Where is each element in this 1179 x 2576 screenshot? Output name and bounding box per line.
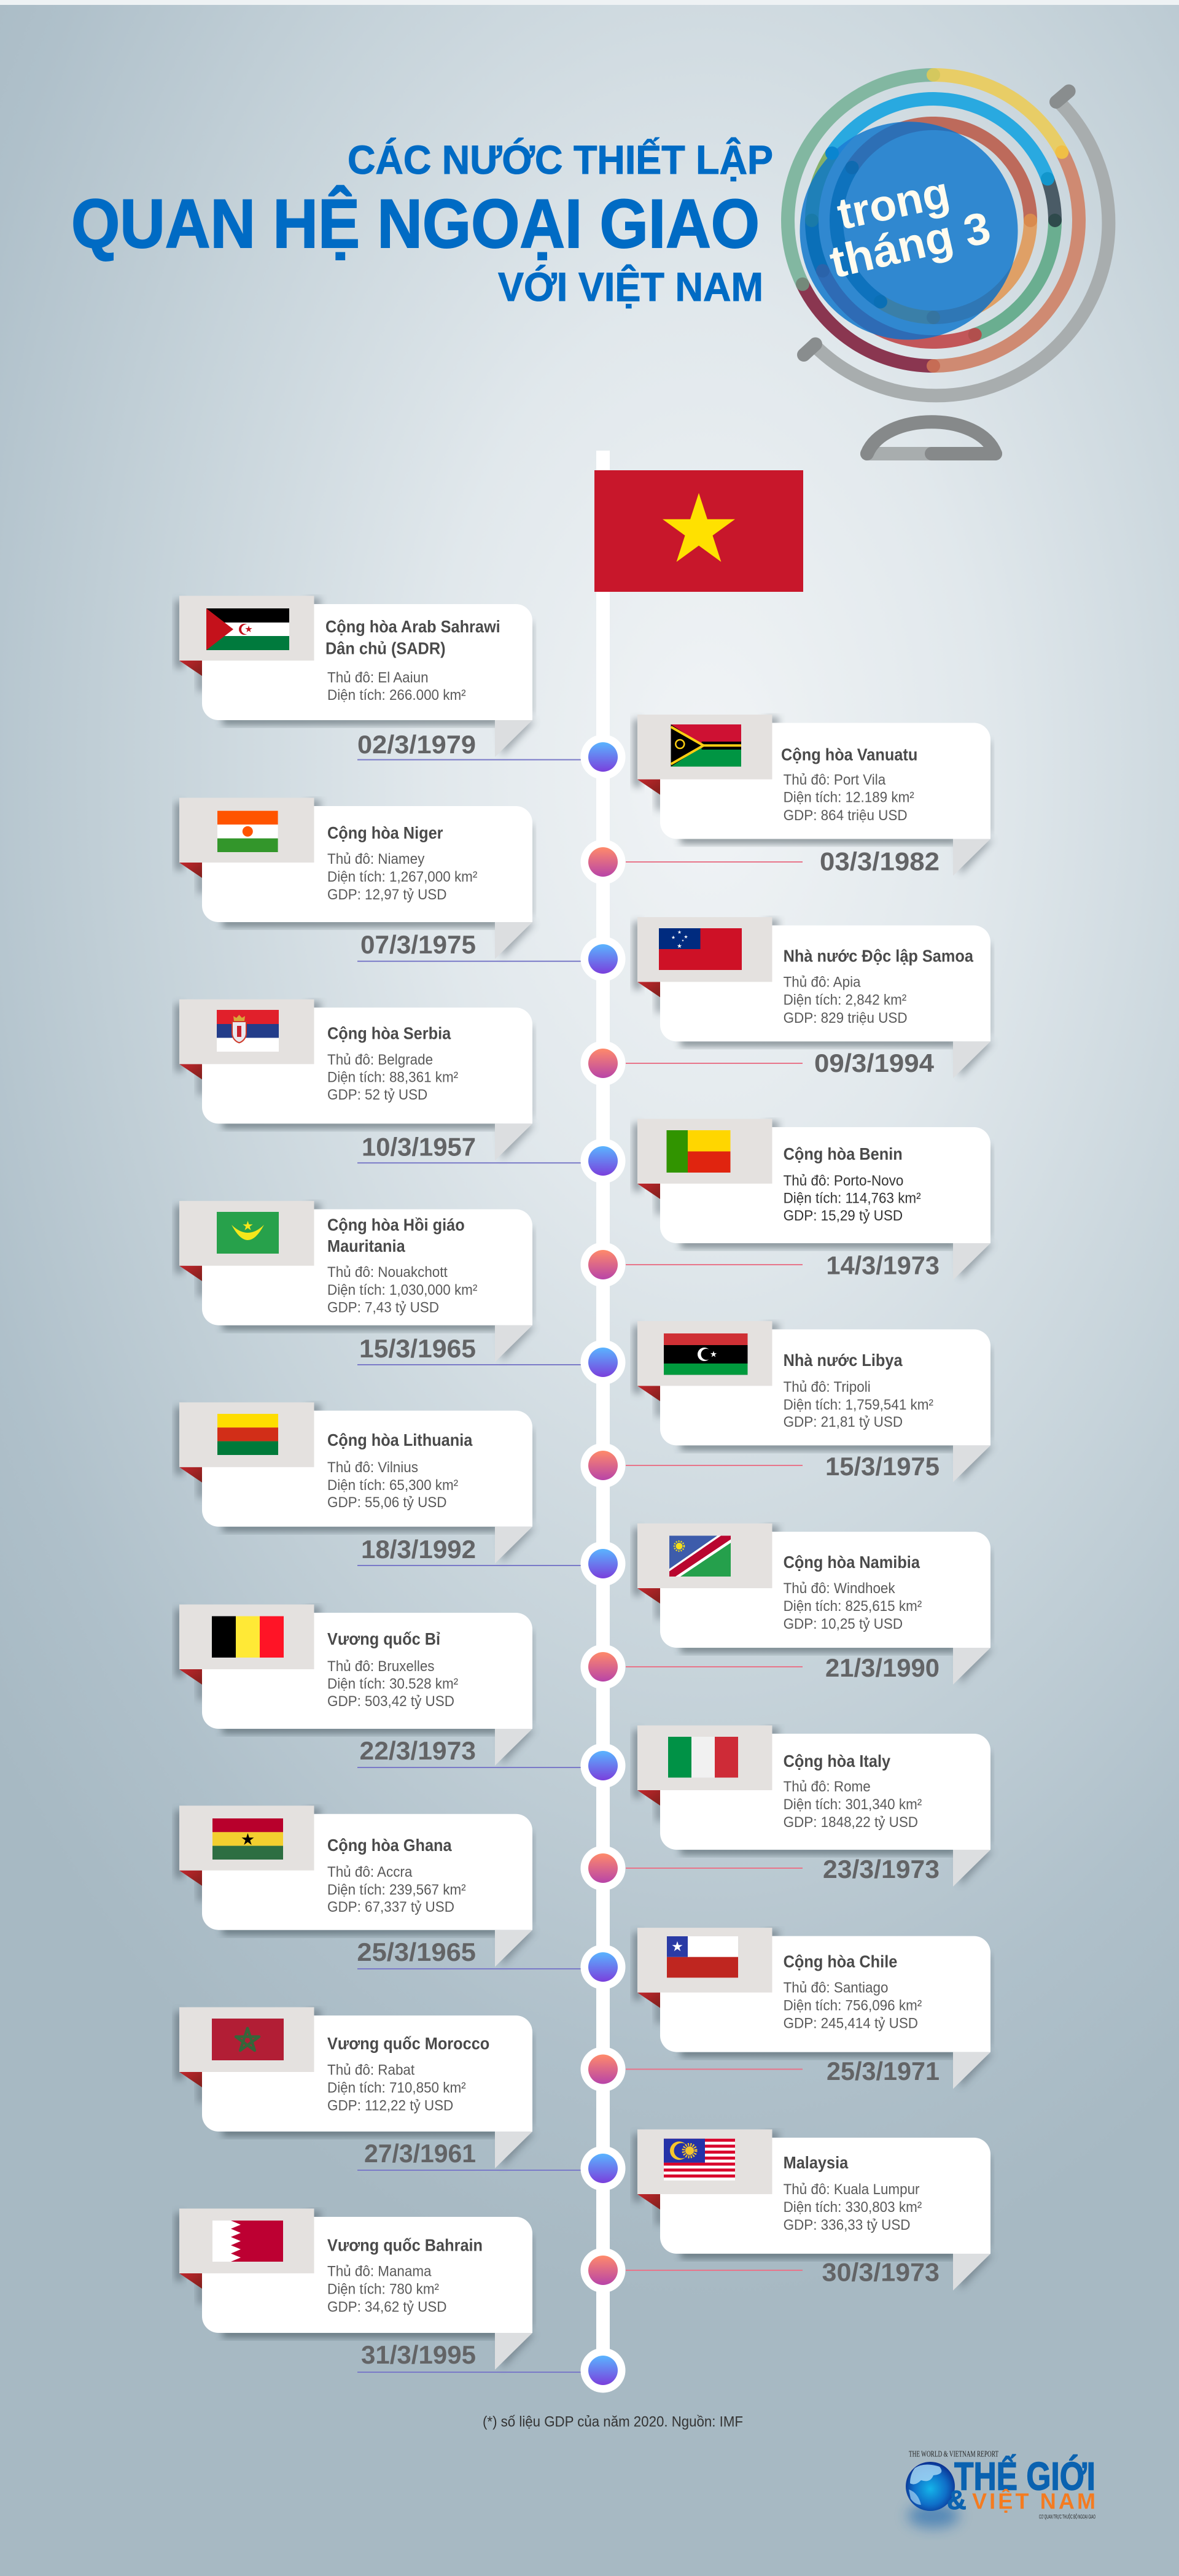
panel: Samoa: GDP: 829 triệu USD: [784, 1009, 908, 1026]
footnote: (*) số liệu GDP của năm 2020. Nguồn: IMF: [483, 2414, 743, 2431]
panel: Sahrawi: Thủ đô: El Aaiun: [327, 669, 429, 686]
date: 21/3/1990: [825, 1653, 940, 1682]
text: Vương quốc Bahrain: [327, 2235, 483, 2255]
title: VỚI VIỆT NAM: [498, 264, 763, 309]
date: 15/3/1975: [825, 1452, 940, 1481]
date: 02/3/1979: [357, 730, 476, 759]
flag: [667, 1130, 731, 1173]
text: Malaysia: [784, 2153, 849, 2172]
panel: Samoa: Thủ đô: Apia: [784, 974, 861, 990]
panel: Malaysia: [581, 2129, 994, 2292]
panel: Sahrawi: Diện tích: 266.000 km²: [327, 686, 466, 703]
panel: Benin: [581, 1119, 994, 1287]
flag: [659, 928, 742, 970]
flag: [217, 1414, 278, 1455]
panel: Libya: Diện tích: 1,759,541 km²: [784, 1396, 933, 1413]
panel: Lithuania: Diện tích: 65,300 km²: [327, 1476, 458, 1493]
panel: Ghana: [176, 1806, 625, 1989]
panel: Italy: Diện tích: 301,340 km²: [784, 1796, 922, 1812]
panel: Serbia: GDP: 52 tỷ USD: [327, 1086, 427, 1103]
text: Cộng hòa Vanuatu: [781, 745, 917, 764]
flag: [217, 1010, 279, 1052]
panel: Serbia: Diện tích: 88,361 km²: [327, 1069, 458, 1085]
panel: Benin: Thủ đô: Porto-Novo: [784, 1172, 903, 1189]
text: Vương quốc Morocco: [327, 2034, 489, 2053]
panel: Bỉ: Diện tích: 30.528 km²: [327, 1675, 458, 1692]
panel: Mauritania: Diện tích: 1,030,000 km²: [327, 1281, 478, 1298]
icon: globe: [788, 68, 1108, 454]
text: Cộng hòa Chile: [784, 1952, 897, 1971]
logo: &: [947, 2485, 967, 2515]
logo: VIỆT NAM: [972, 2488, 1095, 2514]
panel: Bahrain: Diện tích: 780 km²: [327, 2281, 439, 2297]
panel: Italy: Thủ đô: Rome: [784, 1778, 871, 1794]
panel: Italy: GDP: 1848,22 tỷ USD: [784, 1814, 918, 1830]
text: Cộng hòa Ghana: [327, 1836, 453, 1855]
panel: Chile: [581, 1928, 994, 2092]
date: 14/3/1973: [827, 1251, 940, 1279]
panel: Sahrawi: [176, 596, 625, 780]
panel: Namibia: Thủ đô: Windhoek: [784, 1580, 895, 1596]
text: [327, 1215, 465, 1255]
panel: Samoa: Diện tích: 2,842 km²: [784, 991, 907, 1008]
panel: Vanuatu: Thủ đô: Port Vila: [784, 771, 885, 788]
panel: Malaysia: Diện tích: 330,803 km²: [784, 2198, 922, 2215]
date: 15/3/1965: [359, 1334, 476, 1363]
text: Cộng hòa Serbia: [327, 1023, 451, 1043]
panel: Vanuatu: Diện tích: 12.189 km²: [784, 789, 914, 805]
flag: [217, 1212, 279, 1254]
flag: [668, 1737, 738, 1778]
text: Cộng hòa Benin: [784, 1144, 903, 1163]
panel: Libya: [581, 1321, 994, 1488]
panel: Ghana: GDP: 67,337 tỷ USD: [327, 1898, 454, 1915]
panel: Malaysia: Thủ đô: Kuala Lumpur: [784, 2181, 920, 2197]
panel: Serbia: Thủ đô: Belgrade: [327, 1051, 433, 1068]
panel: Bỉ: GDP: 503,42 tỷ USD: [327, 1693, 454, 1709]
date: 09/3/1994: [814, 1049, 935, 1077]
text: Cộng hòa Lithuania: [327, 1430, 473, 1449]
panel: Bahrain: GDP: 34,62 tỷ USD: [327, 2299, 446, 2315]
panel: Bahrain: [176, 2209, 625, 2393]
flag: [671, 724, 741, 767]
date: 22/3/1973: [360, 1736, 476, 1765]
text: Cộng hòa Namibia: [784, 1553, 920, 1572]
panel: Morocco: GDP: 112,22 tỷ USD: [327, 2097, 453, 2114]
flag: [212, 2221, 283, 2262]
logo: THE WORLD & VIETNAM REPORT: [909, 2450, 998, 2459]
date: 27/3/1961: [364, 2139, 476, 2168]
date: 23/3/1973: [823, 1855, 940, 1884]
panel: Namibia: Diện tích: 825,615 km²: [784, 1597, 922, 1614]
date: 31/3/1995: [361, 2340, 476, 2369]
timeline spine: [596, 451, 610, 2370]
panel: Serbia: [176, 999, 625, 1184]
flag: [206, 608, 289, 650]
panel: Niger: [176, 798, 625, 981]
logo: THẾ GIỚI: [954, 2454, 1095, 2499]
text: Vương quốc Bỉ: [327, 1629, 440, 1648]
flag: [664, 2139, 735, 2181]
date: 18/3/1992: [361, 1535, 476, 1564]
text: Mauritania: [327, 1236, 406, 1255]
panel: Chile: GDP: 245,414 tỷ USD: [784, 2015, 918, 2031]
panel: Vanuatu: GDP: 864 triệu USD: [784, 807, 908, 823]
panel: Benin: GDP: 15,29 tỷ USD: [784, 1207, 903, 1224]
panel: Chile: Thủ đô: Santiago: [784, 1979, 888, 1996]
panel: Lithuania: Thủ đô: Vilnius: [327, 1459, 418, 1475]
icon: globe: trong: [833, 168, 954, 239]
panel: Chile: Diện tích: 756,096 km²: [784, 1997, 922, 2014]
date: 07/3/1975: [360, 930, 476, 959]
panel: Niger: Thủ đô: Niamey: [327, 850, 425, 867]
panel: Mauritania: GDP: 7,43 tỷ USD: [327, 1299, 439, 1316]
panel: Vanuatu: [581, 715, 994, 884]
panel: Libya: GDP: 21,81 tỷ USD: [784, 1413, 903, 1430]
panel: Samoa: [581, 917, 994, 1085]
panel: Ghana: Thủ đô: Accra: [327, 1863, 412, 1880]
flag: [212, 2019, 284, 2060]
date: 25/3/1971: [827, 2057, 940, 2085]
panel: Mauritania: [176, 1201, 625, 1385]
panel: Libya: Thủ đô: Tripoli: [784, 1378, 871, 1395]
flag: [667, 1936, 738, 1977]
panel: Morocco: Diện tích: 710,850 km²: [327, 2079, 466, 2096]
flag: [212, 1818, 283, 1860]
flag: [669, 1536, 731, 1577]
text: Cộng hòa Hồi giáo: [327, 1215, 465, 1235]
title: QUAN HỆ NGOẠI GIAO: [71, 185, 760, 262]
panel: Niger: GDP: 12,97 tỷ USD: [327, 886, 446, 902]
flag: [212, 1616, 284, 1658]
panel: Namibia: [581, 1524, 994, 1690]
panel: Niger: Diện tích: 1,267,000 km²: [327, 868, 478, 885]
panel: Morocco: [176, 2008, 625, 2190]
panel: Bahrain: Thủ đô: Manama: [327, 2263, 432, 2279]
panel: Benin: Diện tích: 114,763 km²: [784, 1190, 921, 1206]
flag: [217, 811, 278, 852]
date: 03/3/1982: [820, 847, 940, 875]
text: Cộng hòa Niger: [327, 823, 443, 842]
panel: Italy: [581, 1725, 994, 1891]
panel: Malaysia: GDP: 336,33 tỷ USD: [784, 2216, 911, 2233]
date: 10/3/1957: [362, 1132, 476, 1161]
panel: Ghana: Diện tích: 239,567 km²: [327, 1881, 466, 1898]
icon: globe: tháng 3: [825, 203, 995, 288]
panel: Lithuania: GDP: 55,06 tỷ USD: [327, 1494, 446, 1510]
text: Nhà nước Độc lập Samoa: [784, 947, 974, 966]
date: 30/3/1973: [822, 2258, 940, 2287]
panel: Morocco: Thủ đô: Rabat: [327, 2062, 415, 2078]
date: 25/3/1965: [357, 1938, 476, 1966]
text: Cộng hòa Arab Sahrawi: [325, 617, 500, 636]
text: Nhà nước Libya: [784, 1351, 903, 1370]
panel: Bỉ: [176, 1605, 625, 1788]
title: [71, 137, 773, 309]
flag: [664, 1333, 748, 1375]
title: CÁC NƯỚC THIẾT LẬP: [348, 137, 773, 182]
panel: Mauritania: Thủ đô: Nouakchott: [327, 1263, 448, 1280]
logo: CƠ QUAN TRỰC THUỘC BỘ NGOẠI GIAO: [1039, 2514, 1095, 2520]
panel: Namibia: GDP: 10,25 tỷ USD: [784, 1615, 903, 1632]
panel: Lithuania: [176, 1402, 625, 1586]
logo: [906, 2450, 1095, 2528]
text: Cộng hòa Italy: [784, 1752, 890, 1771]
panel: Bỉ: Thủ đô: Bruxelles: [327, 1658, 435, 1674]
text: Dân chủ (SADR): [325, 638, 446, 658]
flag: Việt Nam: [594, 470, 803, 592]
text: [325, 617, 500, 658]
